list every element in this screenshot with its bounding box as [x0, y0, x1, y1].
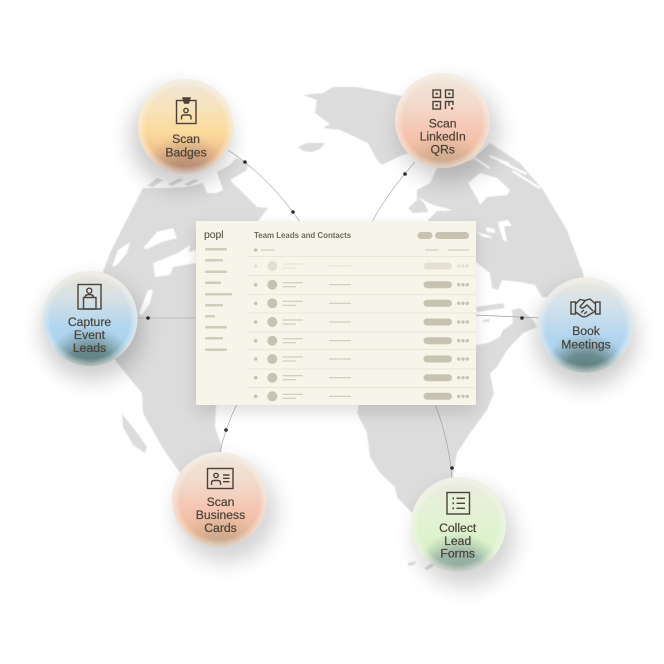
icon: business card	[208, 468, 233, 488]
label: Scan	[429, 116, 457, 130]
label: Forms	[440, 546, 475, 560]
label: Scan	[207, 495, 234, 509]
label: Cards	[204, 521, 237, 535]
sidebar menu	[205, 248, 232, 351]
icon: id badge	[176, 98, 196, 124]
node: scan badges	[131, 79, 233, 188]
header buttons	[418, 232, 469, 239]
connector: collect lead forms	[435, 404, 454, 478]
panel: team leads and contacts dashboard	[196, 221, 476, 412]
landmass: central strip	[476, 303, 505, 322]
table row 6	[254, 354, 469, 364]
label: Capture	[68, 315, 111, 329]
table row 3	[254, 298, 469, 308]
label: Book	[572, 324, 601, 338]
label: Lead	[444, 534, 471, 548]
sea details: white inlets on the right continent	[418, 155, 540, 242]
label: Collect	[439, 521, 477, 535]
table row 5	[254, 336, 469, 346]
node: scan business cards	[172, 452, 276, 562]
label: Meetings	[561, 338, 611, 352]
table row 4	[254, 317, 469, 327]
label: LinkedIn	[420, 130, 466, 144]
label: Event	[74, 328, 106, 342]
world map	[97, 87, 590, 570]
connector: scan badges	[228, 150, 300, 222]
heading: Team Leads and Contacts	[254, 231, 352, 240]
icon: form list	[447, 492, 470, 514]
node: scan linkedin qrs	[395, 73, 499, 182]
table header row	[254, 248, 469, 252]
landmass: small island	[298, 143, 325, 152]
label: Leads	[73, 341, 106, 355]
connector: scan business cards	[220, 404, 237, 452]
table row 1 (faded)	[254, 261, 469, 271]
label: Badges	[165, 146, 207, 160]
landmass: southern continent	[357, 308, 537, 513]
connector: scan linkedin qrs	[372, 162, 415, 222]
icon: qr code	[433, 90, 453, 109]
landmass: island south west	[122, 414, 147, 453]
label: QRs	[431, 142, 455, 156]
landmass: small southern fragments	[408, 561, 434, 570]
node: collect lead forms	[411, 477, 515, 587]
table row 7	[254, 373, 469, 383]
node: book meetings	[536, 278, 636, 387]
logo: popl: popl	[204, 229, 223, 241]
icon: event booth	[78, 284, 101, 309]
connector: capture event leads	[136, 316, 197, 320]
row dividers	[247, 256, 476, 388]
node: capture event leads	[42, 271, 142, 380]
table row 2	[254, 280, 469, 290]
label: Scan	[172, 132, 200, 146]
landmass: left top fragments	[147, 178, 198, 187]
label: Business	[196, 508, 245, 522]
icon: handshake	[571, 299, 600, 317]
table row 8	[254, 391, 469, 401]
landmass: northern island	[303, 87, 420, 165]
connector: book meetings	[475, 315, 540, 320]
landmass: right continent	[408, 143, 590, 300]
landmass: left continent	[97, 158, 268, 490]
